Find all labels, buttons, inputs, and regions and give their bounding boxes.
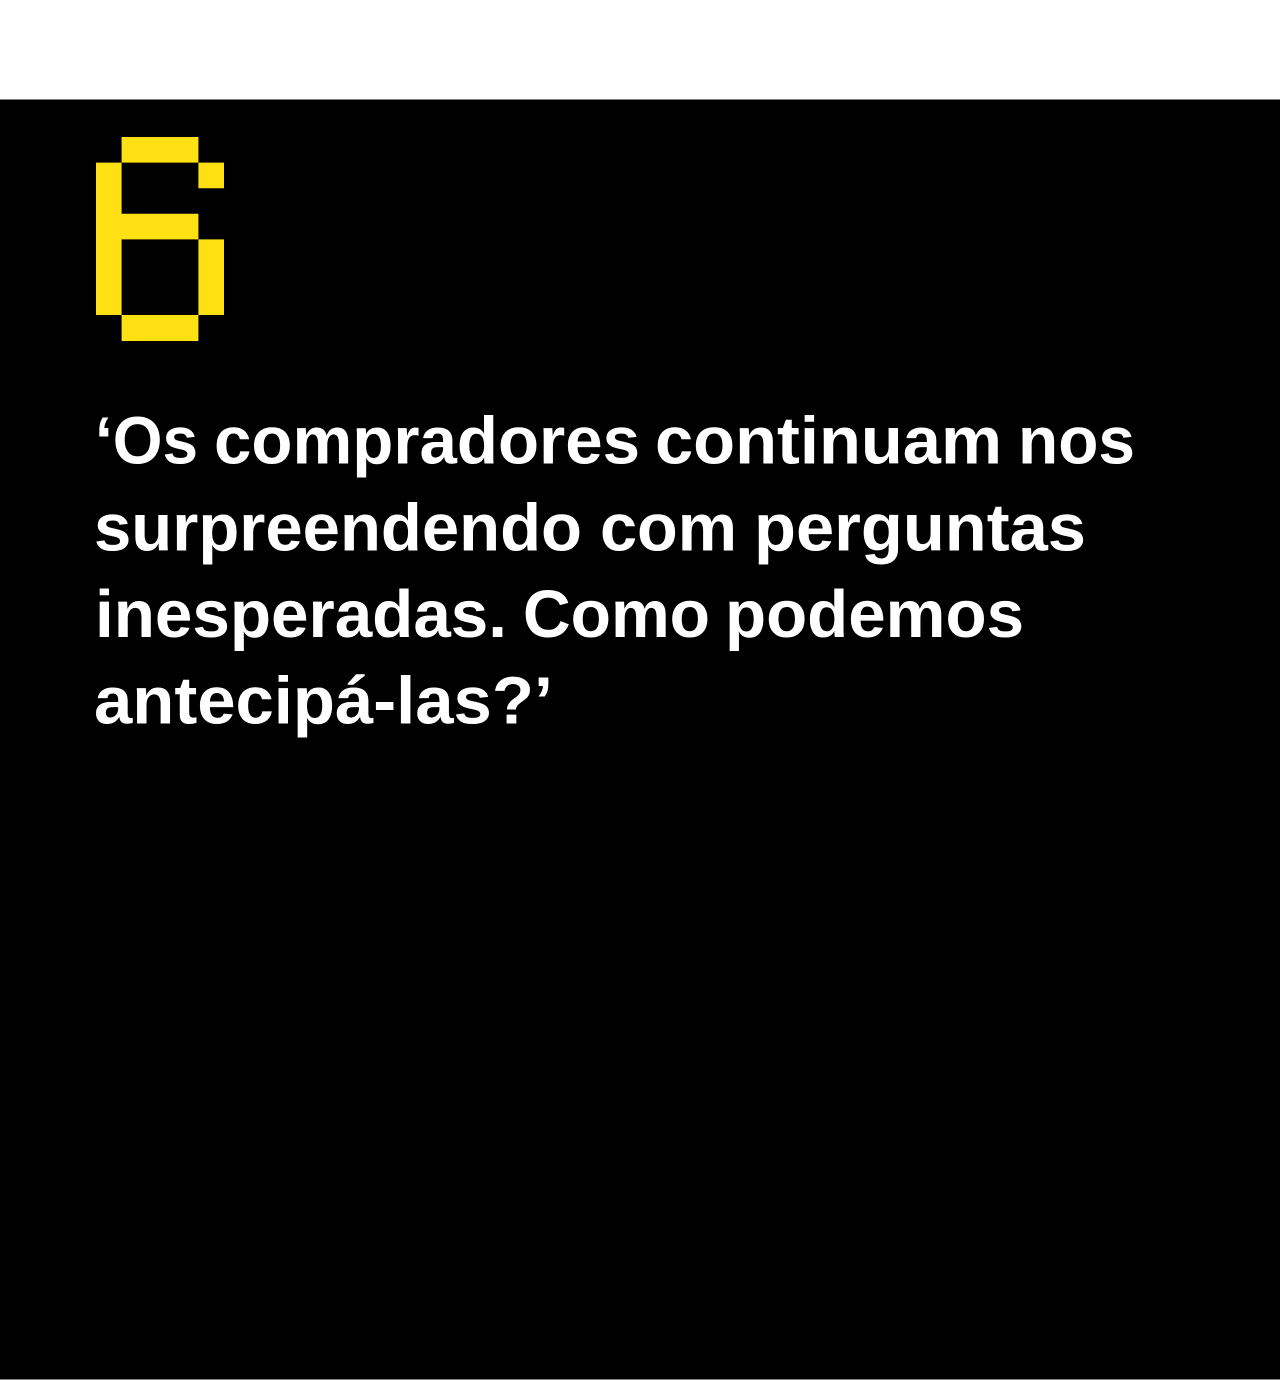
heading: quote: podemos <box>725 577 1024 652</box>
heading: quote: Como <box>523 577 710 652</box>
heading: quote: compradores <box>214 404 640 478</box>
heading: quote: com <box>600 490 737 565</box>
heading: quote: inesperadas. <box>95 577 507 652</box>
heading: quote: surpreendendo <box>94 490 582 565</box>
heading: quote: perguntas <box>754 490 1086 565</box>
heading: quote: nos <box>1018 404 1135 478</box>
heading: quote <box>94 404 1135 739</box>
heading: quote: ‘Os <box>95 404 198 478</box>
icon: pixel digit 6 <box>96 137 224 341</box>
heading: quote: continuam <box>655 404 1002 478</box>
heading: quote: antecipá-las?’ <box>94 664 553 739</box>
